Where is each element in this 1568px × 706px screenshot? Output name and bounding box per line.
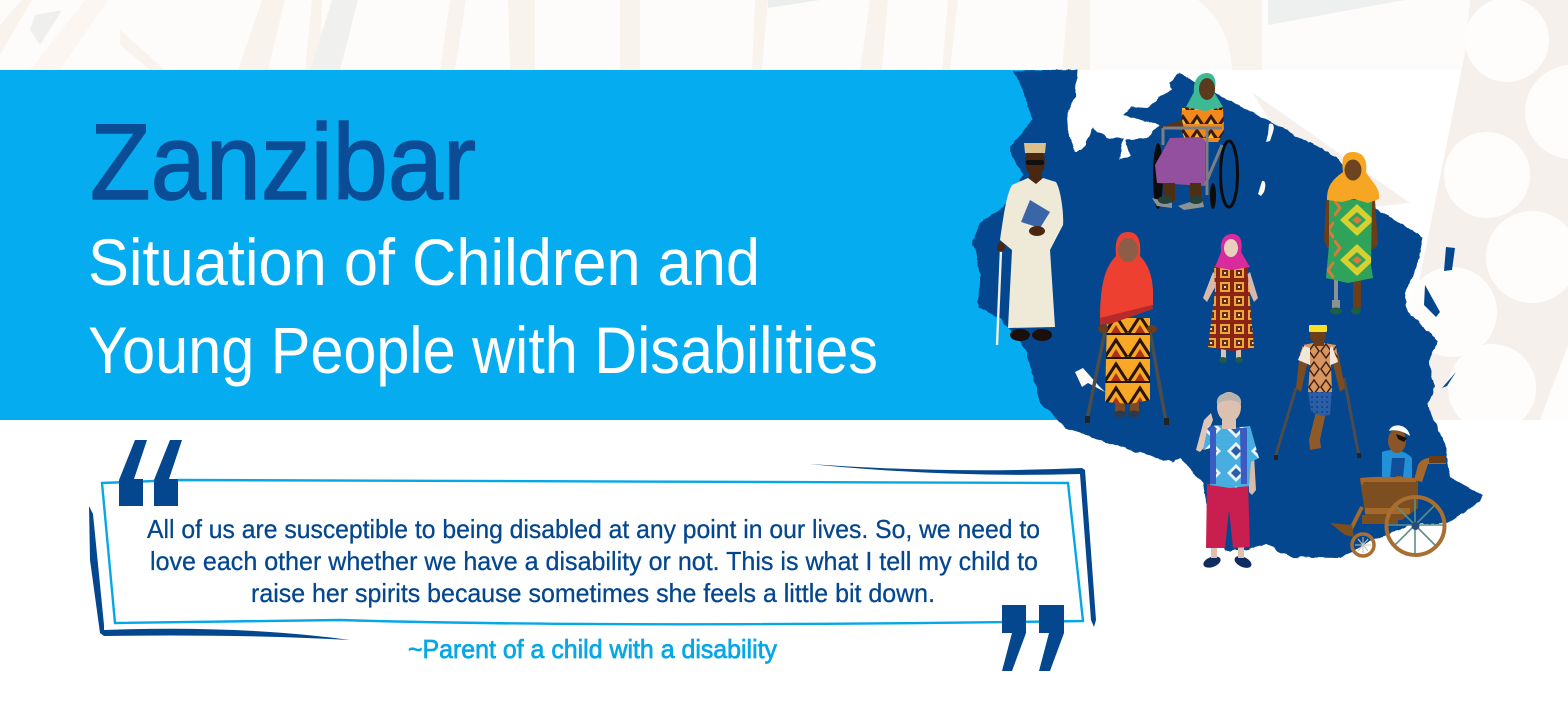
subheading line 2: Young People with Disabilities — [88, 313, 878, 387]
figure: girl with pink hijab — [1203, 234, 1258, 363]
title — [88, 101, 878, 387]
islands and lakes — [1075, 123, 1456, 392]
closing quotation mark — [1002, 605, 1064, 671]
quote frame: light blue inner box — [102, 480, 1083, 624]
figure: man with crutches — [1274, 325, 1361, 460]
quote text: All of us are susceptible to being disabled at any point in our lives. So, we need to — [147, 514, 1040, 544]
figure: woman with red hijab and crutches — [1085, 232, 1169, 425]
quote frame: dark brush strokes top right — [809, 464, 1096, 627]
figure: blind man with cane and book — [997, 143, 1063, 345]
quote text: raise her spirits because sometimes she feels a little bit down. — [251, 578, 935, 608]
background pattern: top and right beige shapes — [0, 0, 1568, 440]
quote text: love each other whether we have a disability or not. This is what I tell my child to — [150, 546, 1038, 576]
quote text — [147, 514, 1040, 608]
opening quotation mark — [119, 440, 182, 506]
quote attribution: ~Parent of a child with a disability — [408, 634, 777, 664]
figure: woman with orange hijab and prosthetic leg — [1324, 152, 1379, 314]
figure: woman in wheelchair — [1152, 73, 1238, 210]
subheading line 1: Situation of Children and — [88, 225, 760, 299]
map of Tanzania — [973, 70, 1482, 558]
quote frame: dark brush strokes bottom left — [89, 506, 350, 640]
heading: Zanzibar: Zanzibar — [90, 101, 476, 222]
figure: boy in wheelchair — [1330, 425, 1446, 556]
figure: man with albinism pointing to his eye — [1196, 392, 1259, 570]
title banner — [0, 70, 1060, 420]
